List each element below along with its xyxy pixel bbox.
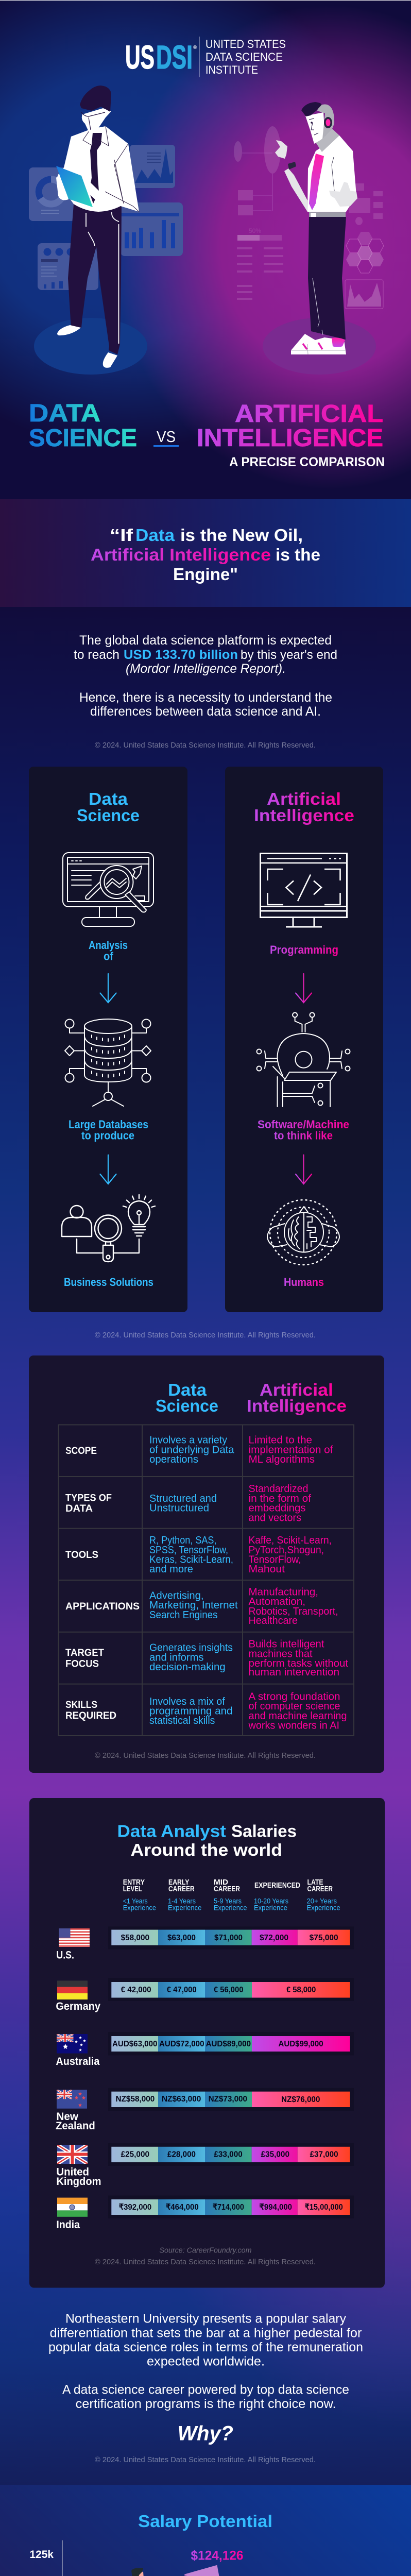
text: salary differentiation	[48, 2311, 363, 2411]
icon: person, magnifier and light bulb	[62, 1195, 155, 1262]
row: New Zealand	[56, 2088, 354, 2132]
row: United Kingdom: £28,000	[167, 2150, 196, 2159]
row: target focus	[65, 1639, 348, 1678]
flag: New Zealand	[57, 2090, 87, 2109]
column headers: Experience	[214, 1904, 247, 1911]
intro text	[74, 633, 337, 719]
copyright: © 2024. United States Data Science Institute. All Rights Reserved.	[95, 1331, 316, 1340]
row: Australia: AUD$72,000	[159, 2040, 204, 2048]
row: Germany: € 58,000	[286, 1986, 316, 1994]
row: Australia: AUD$89,000	[206, 2040, 251, 2048]
background dashboards: artificial intelligence: 50%	[249, 227, 261, 234]
row: target focus: FOCUS	[65, 1659, 99, 1669]
row: tools: Mahout	[248, 1564, 285, 1575]
heading: why: Why?	[178, 2422, 233, 2445]
row: United States: $63,000	[167, 1934, 196, 1942]
column headers: EARLY	[168, 1878, 190, 1887]
standing platforms	[34, 318, 376, 375]
chart: salary growth axes	[30, 2540, 230, 2576]
source and copyright	[95, 2246, 316, 2266]
panel: artificial intelligence flow	[225, 767, 383, 1312]
text: salary differentiation: popular data science roles in terms of the remuneration	[48, 2340, 363, 2354]
logo: USDSI United States Data Science Institute: DSI	[156, 39, 193, 76]
copyright: © 2024. United States Data Science Institute. All Rights Reserved.	[95, 741, 316, 750]
table heading: Intelligence	[247, 1396, 347, 1415]
arrow	[100, 1155, 116, 1184]
column headers: 5-9 Years	[214, 1897, 242, 1905]
row: skills required: of computer science	[248, 1701, 340, 1712]
illustration: walking businessman	[110, 2568, 161, 2576]
label: large databases to produce: Large Databases	[68, 1118, 148, 1131]
row: skills required: SKILLS	[65, 1700, 97, 1710]
row: United Kingdom	[56, 2143, 354, 2188]
title: data science: DATA	[29, 400, 100, 427]
column headers: 1-4 Years	[168, 1897, 196, 1905]
flag: United States	[59, 1928, 90, 1947]
label: large databases to produce: to produce	[81, 1129, 134, 1142]
illustration: robot in shirt and tie	[275, 102, 357, 354]
arrow	[100, 974, 116, 1003]
row: applications: Automation,	[248, 1596, 305, 1607]
arrow	[296, 974, 312, 1003]
text: salary differentiation: certification programs is the right choice now.	[76, 2397, 336, 2411]
label: programming: Programming	[270, 943, 338, 956]
panel heading: Data	[89, 789, 128, 808]
row: Australia: AUD$63,000	[112, 2040, 157, 2048]
heading: Salary Potential	[138, 2512, 272, 2531]
column headers	[123, 1878, 340, 1911]
quote text: Data	[135, 526, 175, 545]
column headers: <1 Years	[123, 1897, 148, 1905]
title: artificial intelligence: INTELLIGENCE	[197, 425, 383, 452]
row: scope	[65, 1435, 333, 1465]
quote text: Engine"	[173, 565, 238, 584]
title: artificial intelligence: ARTIFICIAL	[235, 400, 383, 428]
text: salary differentiation: A data science career powered by top data science	[62, 2382, 349, 2397]
intro text: differences between data science and AI.	[90, 704, 321, 719]
row: Germany: Germany	[56, 2001, 100, 2012]
row: tools: and more	[149, 1564, 193, 1575]
row: scope: Involves a variety	[149, 1435, 227, 1446]
row: scope: implementation of	[248, 1445, 333, 1456]
quote section	[0, 499, 411, 607]
row: New Zealand: NZ$73,000	[209, 2095, 247, 2104]
row: United Kingdom: United	[56, 2166, 89, 2178]
column headers: ENTRY	[123, 1878, 145, 1887]
intro text: The global data science platform is expected	[79, 633, 332, 648]
row: applications: APPLICATIONS	[65, 1601, 140, 1612]
column headers: CAREER	[168, 1885, 195, 1893]
icon: monitor with magnifier	[63, 853, 153, 926]
row: India: ₹392,000	[119, 2203, 151, 2212]
row: tools: Kaffe, Scikit-Learn,	[248, 1535, 332, 1546]
table heading: Science	[156, 1396, 218, 1415]
flag: United Kingdom	[57, 2145, 88, 2164]
column headers: 10-20 Years	[254, 1897, 288, 1905]
row: applications: Manufacturing,	[248, 1587, 318, 1598]
column headers: Experience	[254, 1904, 287, 1911]
row: scope: ML algorithms	[248, 1454, 315, 1465]
row: target focus: machines that	[248, 1649, 313, 1660]
comparison and salary background	[0, 607, 411, 2485]
logo: USDSI United States Data Science Institute: ®	[193, 45, 197, 50]
row: scope: operations	[149, 1454, 198, 1465]
subtitle: A PRECISE COMPARISON	[229, 455, 385, 469]
panel: data analyst salaries	[29, 1798, 385, 2287]
row: applications: Marketing, Internet	[149, 1600, 238, 1611]
intro text: USD 133.70 billion	[124, 648, 238, 662]
row: India: ₹15,00,000	[305, 2203, 343, 2212]
illustration: hand lifting arrow	[73, 2565, 225, 2576]
row: India: ₹714,000	[213, 2203, 244, 2212]
row: United States	[56, 1926, 354, 1961]
copyright: © 2024. United States Data Science Institute. All Rights Reserved.	[95, 2455, 316, 2464]
row: Germany	[56, 1978, 354, 2012]
row: types of data: in the form of	[248, 1493, 311, 1504]
logo: USDSI United States Data Science Institute	[125, 37, 286, 77]
row: applications: Search Engines	[149, 1609, 217, 1621]
chart value label: $124,126	[191, 2548, 243, 2563]
row: Germany: € 42,000	[121, 1986, 151, 1994]
panel heading: Science	[77, 806, 140, 825]
row: United Kingdom: Kingdom	[56, 2176, 101, 2188]
row: tools: R, Python, SAS,	[149, 1535, 216, 1546]
column headers: EXPERIENCED	[254, 1882, 300, 1890]
label: analysis of	[89, 939, 128, 962]
flag: India	[57, 2198, 88, 2217]
arrow	[296, 1155, 312, 1184]
title: data science: SCIENCE	[29, 425, 137, 452]
row: applications	[65, 1587, 338, 1626]
hero section	[0, 1, 411, 499]
background dashboards: data science	[29, 145, 183, 290]
label: humans: Humans	[284, 1276, 324, 1289]
row: skills required	[65, 1691, 347, 1731]
panel heading	[117, 1822, 297, 1859]
row: types of data: DATA	[65, 1503, 93, 1514]
icon: robot head with laptop	[256, 1013, 350, 1107]
row: India: India	[56, 2219, 80, 2231]
versus label: VS	[157, 428, 176, 446]
quote text	[91, 526, 320, 584]
row: Australia	[56, 2032, 354, 2067]
panel: comparison table	[29, 1355, 384, 1773]
row: target focus: decision-making	[149, 1662, 226, 1673]
label: analysis of: Analysis	[89, 939, 128, 952]
flag: Australia	[57, 2034, 88, 2054]
background dashboards: artificial intelligence	[234, 126, 384, 309]
panel: data science flow	[29, 767, 187, 1312]
row: New Zealand: New	[56, 2111, 79, 2123]
row: types of data: TYPES OF	[65, 1493, 112, 1503]
column headers: Experience	[307, 1904, 340, 1911]
label: software machine to think like	[258, 1118, 349, 1142]
row: India: ₹994,000	[259, 2203, 292, 2212]
row: United States: $75,000	[310, 1934, 338, 1942]
title: data science	[29, 400, 137, 452]
illustration: data scientist with tablet	[56, 86, 139, 368]
row: target focus: and informs	[149, 1652, 204, 1663]
table heading: Artificial	[260, 1380, 333, 1399]
text: salary differentiation: expected worldwide.	[147, 2354, 265, 2368]
text: salary differentiation: differentiation that sets the bar at a higher pedestal for	[50, 2326, 362, 2340]
panel heading: Salaries	[231, 1822, 297, 1840]
row: target focus: Builds intelligent	[248, 1639, 324, 1650]
source and copyright: © 2024. United States Data Science Institute. All Rights Reserved.	[95, 2258, 316, 2266]
row: tools: SPSS, TensorFlow,	[149, 1545, 228, 1556]
row: target focus: TARGET	[65, 1648, 104, 1658]
row: skills required: Involves a mix of	[149, 1696, 225, 1707]
row: tools: TOOLS	[65, 1550, 98, 1561]
row: Germany: € 47,000	[167, 1986, 197, 1994]
panel heading	[254, 789, 354, 825]
row: applications: Advertising,	[149, 1590, 204, 1602]
table heading: Data	[168, 1380, 207, 1399]
row: New Zealand: Zealand	[56, 2120, 95, 2132]
quote text: “If	[110, 526, 133, 545]
row: Australia: Australia	[56, 2056, 100, 2067]
column headers: LEVEL	[123, 1885, 142, 1893]
panel heading: Artificial	[267, 789, 341, 808]
panel heading: Data Analyst	[117, 1822, 226, 1840]
row: United Kingdom: £33,000	[214, 2150, 243, 2159]
row: target focus: perform tasks without	[248, 1658, 348, 1669]
row: tools	[65, 1535, 332, 1575]
column headers: LATE	[307, 1878, 323, 1887]
label: software machine to think like: to think like	[274, 1129, 333, 1142]
row: types of data	[65, 1483, 311, 1524]
row: United Kingdom: £37,000	[310, 2150, 338, 2159]
row: types of data: embeddings	[248, 1502, 306, 1514]
row: Germany: € 56,000	[214, 1986, 243, 1994]
column headers: Experience	[168, 1904, 201, 1911]
label: software machine to think like: Software/Machine	[258, 1118, 349, 1131]
row: scope: Limited to the	[248, 1435, 312, 1446]
row: types of data: Unstructured	[149, 1502, 209, 1514]
row: India: ₹464,000	[166, 2203, 199, 2212]
panel heading: Around the world	[131, 1840, 282, 1859]
row: tools: PyTorch,Shogun,	[248, 1545, 324, 1556]
row: skills required: works wonders in AI	[248, 1720, 339, 1731]
icon: half brain half circuit in hands	[267, 1200, 339, 1265]
logo: USDSI United States Data Science Institute: DATA SCIENCE	[206, 50, 283, 63]
intro text: to reach	[74, 648, 119, 662]
row: United States: $71,000	[214, 1934, 243, 1942]
text: salary differentiation: Northeastern University presents a popular salary	[65, 2311, 346, 2326]
column headers: CAREER	[307, 1885, 333, 1893]
icon: code monitor	[260, 853, 347, 927]
intro text: Hence, there is a necessity to understand the	[79, 690, 332, 705]
label: business solutions: Business Solutions	[64, 1276, 153, 1289]
icon: database network	[65, 1019, 151, 1106]
label: large databases to produce	[68, 1118, 148, 1142]
row: India	[56, 2196, 354, 2231]
quote text: is the	[276, 545, 320, 564]
intro text: (Mordor Intelligence Report).	[126, 662, 286, 676]
copyright: © 2024. United States Data Science Institute. All Rights Reserved.	[95, 1751, 316, 1760]
row: New Zealand: NZ$76,000	[281, 2095, 320, 2104]
row: target focus: Generates insights	[149, 1642, 233, 1654]
row: applications: Healthcare	[248, 1615, 298, 1626]
logo: USDSI United States Data Science Institute: UNITED STATES	[206, 38, 286, 50]
row: skills required: and machine learning	[248, 1710, 347, 1722]
flag: Germany	[57, 1980, 88, 1999]
label: analysis of: of	[104, 950, 114, 962]
title: artificial intelligence	[197, 400, 383, 452]
row: skills required: REQUIRED	[65, 1710, 116, 1721]
row: target focus: human intervention	[248, 1667, 339, 1678]
row: United States: U.S.	[56, 1950, 74, 1961]
row: United Kingdom: £35,000	[261, 2150, 289, 2159]
row: types of data: Structured and	[149, 1493, 217, 1504]
row: applications: Robotics, Transport,	[248, 1606, 338, 1617]
quote text: is the New Oil,	[180, 526, 303, 545]
table heading	[156, 1380, 347, 1415]
salary potential section	[0, 2485, 411, 2576]
column headers: MID	[214, 1878, 228, 1887]
intro text: by this year's end	[241, 648, 337, 662]
row: New Zealand: NZ$58,000	[115, 2095, 155, 2104]
table grid	[58, 1425, 354, 1736]
row: scope: of underlying Data	[149, 1445, 234, 1456]
panel heading: Intelligence	[254, 806, 354, 825]
row: New Zealand: NZ$63,000	[162, 2095, 201, 2104]
logo: USDSI United States Data Science Institute: INSTITUTE	[206, 63, 258, 76]
column headers: CAREER	[214, 1885, 240, 1893]
column headers: Experience	[123, 1904, 156, 1911]
panel heading	[77, 789, 140, 825]
row: United States: $58,000	[121, 1934, 149, 1942]
row: types of data: and vectors	[248, 1513, 301, 1524]
source and copyright: Source: CareerFoundry.com	[160, 2246, 251, 2255]
quote text: Artificial Intelligence	[91, 545, 271, 564]
logo: USDSI United States Data Science Institute: US	[125, 39, 155, 76]
row: Australia: AUD$99,000	[278, 2040, 323, 2048]
row: tools: Keras, Scikit-Learn,	[149, 1554, 233, 1565]
column headers: 20+ Years	[307, 1897, 337, 1905]
row: skills required: statistical skills	[149, 1715, 215, 1726]
row: United States: $72,000	[260, 1934, 288, 1942]
row: skills required: A strong foundation	[248, 1691, 340, 1703]
row: skills required: programming and	[149, 1705, 233, 1717]
chart: salary growth axes: 125k	[30, 2549, 54, 2561]
row: tools: TensorFlow,	[248, 1554, 301, 1565]
row: types of data: Standardized	[248, 1483, 308, 1495]
row: United Kingdom: £25,000	[121, 2150, 149, 2159]
row: scope: SCOPE	[65, 1446, 97, 1456]
